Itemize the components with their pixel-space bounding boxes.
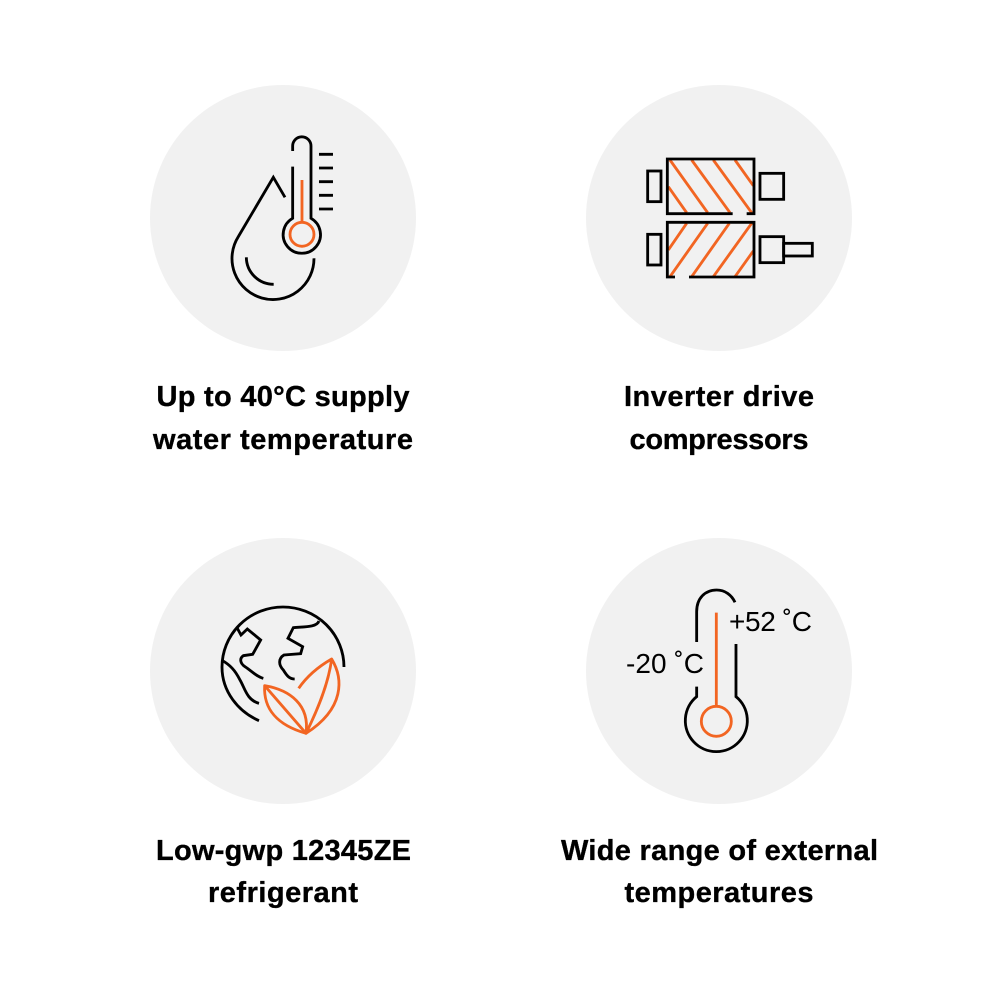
label: refrigerant (208, 877, 358, 909)
background circle (586, 85, 852, 351)
label: minimum temperature: -20 ˚C (626, 648, 704, 679)
icon: water drop with thermometer (232, 137, 333, 300)
label: Inverter drive (624, 381, 814, 413)
icon: thermometer with range (685, 590, 747, 752)
panel: compressors (586, 85, 852, 456)
background circle (586, 538, 852, 804)
icon: globe with leaves (222, 607, 344, 733)
panel: refrigerant (150, 538, 416, 909)
label: Wide range of external (561, 835, 878, 867)
icon: inverter compressors (648, 159, 812, 277)
background circle (150, 85, 416, 351)
label (561, 835, 878, 909)
panel: external temperatures (561, 538, 878, 909)
label: maximum temperature: +52 ˚C (729, 606, 812, 637)
label: water temperature (152, 424, 413, 456)
label: compressors (630, 424, 808, 456)
label: temperatures (624, 877, 814, 909)
label (152, 381, 413, 456)
label: Up to 40°C supply (156, 381, 410, 413)
background circle (150, 538, 416, 804)
label (624, 381, 814, 456)
panel: water temperature (150, 85, 416, 456)
label (156, 835, 411, 909)
label: Low-gwp 12345ZE (156, 835, 411, 867)
